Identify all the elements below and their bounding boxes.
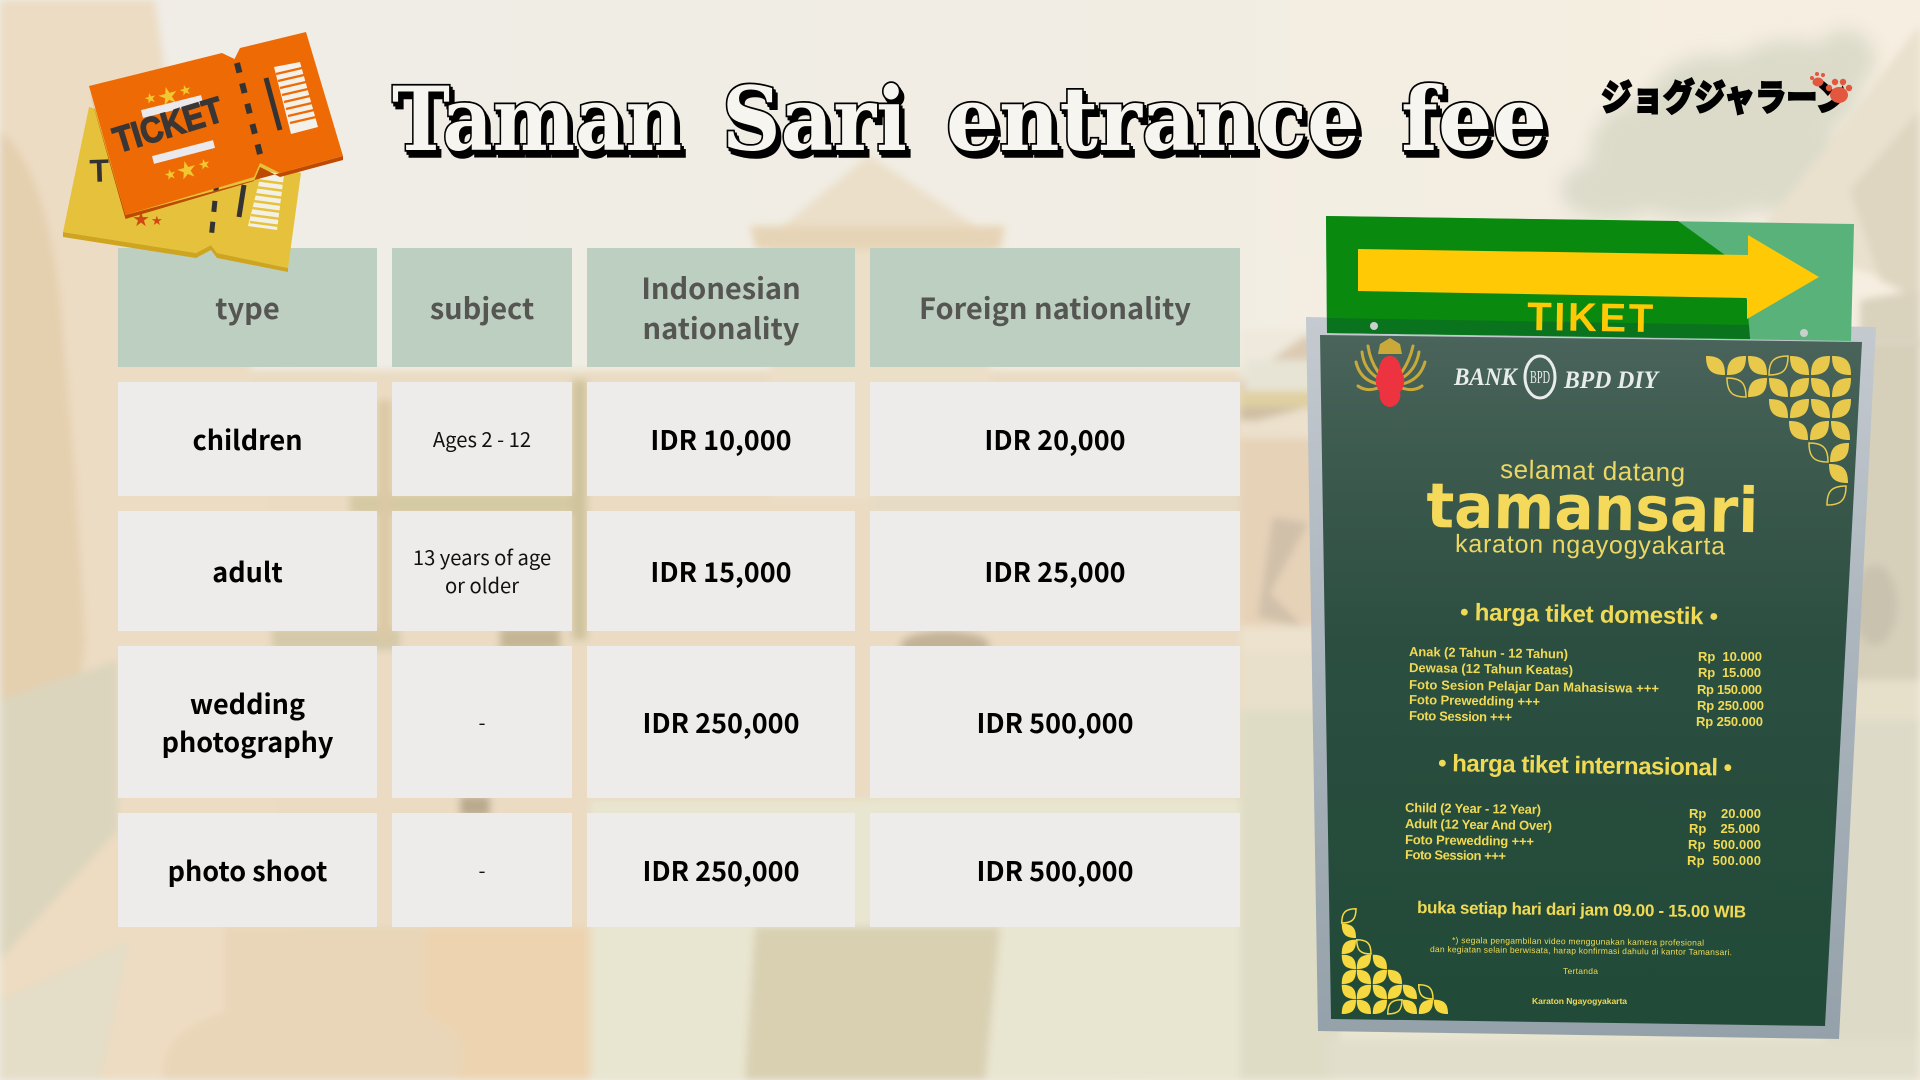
sign section: domestic prices: Dewasa (12 Tahun Keatas): [1409, 660, 1573, 678]
sign section: international prices: Adult (12 Year And Over): [1405, 816, 1552, 833]
sign footnote: Tertanda: [1563, 966, 1598, 976]
steps: [0, 660, 118, 960]
sign section: domestic prices: Foto Sesion Pelajar Dan Mahasiswa +++: [1409, 677, 1660, 696]
bank logo: BPD DIY: [1563, 367, 1661, 394]
leaf ornament bottom left: [1342, 909, 1448, 1014]
row wedding photography: type: wedding: [190, 682, 305, 722]
row adult: subject: [392, 511, 572, 631]
row children: foreign fee: IDR 20,000: [984, 418, 1126, 458]
sign section: domestic prices: Foto Session +++: [1409, 708, 1513, 725]
yellow ticket: T: [89, 152, 110, 189]
emblem: [1356, 338, 1425, 407]
orange ticket: ★: [162, 166, 179, 185]
row adult: subject: 13 years of age: [413, 542, 551, 570]
row photo shoot: type: [118, 813, 377, 927]
row adult: foreign fee: IDR 25,000: [984, 550, 1126, 590]
row photo shoot: foreign fee: [870, 813, 1240, 927]
header: subject: [392, 248, 572, 367]
row children: Indonesian fee: [587, 382, 855, 496]
row photo shoot: Indonesian fee: IDR 250,000: [642, 850, 800, 888]
row wedding photography: Indonesian fee: [587, 646, 855, 798]
orange ticket: ★: [177, 82, 194, 100]
yellow ticket: [63, 107, 301, 272]
water: [590, 800, 1920, 1080]
orange ticket: ★: [142, 90, 159, 108]
sign section: domestic prices: Rp 250.000: [1697, 698, 1764, 713]
sign section: international prices: Rp 500.000: [1687, 853, 1761, 868]
bank logo: BPD: [1530, 367, 1550, 387]
vines through gaps: [350, 494, 575, 514]
row children: Indonesian fee: IDR 10,000: [650, 418, 792, 458]
mid ground: [240, 370, 1250, 950]
sign section: domestic prices: Rp 250.000: [1696, 714, 1763, 729]
sign section: domestic prices: Rp 150.000: [1697, 682, 1762, 697]
tree, top right: [1560, 30, 1875, 220]
row adult: Indonesian fee: [587, 511, 855, 631]
sign footnote: *) segala pengambilan video menggunakan kamera profesional: [1452, 935, 1704, 948]
row adult: subject: or older: [445, 570, 519, 598]
sign section: international prices: Rp 500.000: [1688, 837, 1761, 852]
sign footnote: [1430, 935, 1732, 1006]
header: Indonesian nationality: Indonesian: [641, 266, 801, 308]
bank logo: BANK: [1453, 364, 1519, 391]
header: subject: subject: [430, 286, 534, 328]
sign section: international prices: Rp 25.000: [1689, 821, 1760, 836]
sign section: domestic prices: Rp 15.000: [1698, 665, 1761, 680]
row wedding photography: foreign fee: [870, 646, 1240, 798]
icon: paw prints: [1810, 72, 1852, 103]
row adult: type: [118, 511, 377, 631]
header: Indonesian nationality: nationality: [643, 306, 799, 348]
row adult: Indonesian fee: IDR 15,000: [650, 550, 792, 590]
orange ticket: ★: [196, 156, 213, 174]
row wedding photography: type: photography: [162, 720, 333, 760]
left wall: [0, 0, 280, 1080]
sign section: international prices: Foto Prewedding +++: [1405, 832, 1535, 849]
header: Foreign nationality: [870, 248, 1240, 367]
orange ticket: [89, 32, 343, 219]
row photo shoot: subject: -: [478, 854, 486, 884]
header: Foreign nationality: Foreign nationality: [919, 286, 1191, 328]
dark green board: [1320, 335, 1862, 1026]
sign footnote: Karaton Ngayogyakarta: [1532, 996, 1627, 1006]
row wedding photography: subject: -: [478, 706, 486, 736]
photo: Tamansari ticket sign: [1306, 216, 1876, 1039]
row wedding photography: Indonesian fee: IDR 250,000: [642, 702, 800, 740]
row wedding photography: type: [118, 646, 377, 798]
table: entrance fees: [118, 248, 1240, 927]
right building between table and sign: [1240, 330, 1340, 650]
lower floor: [118, 927, 598, 1080]
row children: subject: [392, 382, 572, 496]
arrow sign: TIKET: [1527, 295, 1654, 341]
bank logo: [1453, 356, 1661, 398]
header: type: [118, 248, 377, 367]
sign section: international prices: Child (2 Year - 12 Year): [1405, 800, 1541, 817]
row adult: type: adult: [212, 550, 283, 590]
sign footnote: dan kegiatan selain berwisata, harap konfirmasi dahulu di kantor Tamansari.: [1430, 944, 1732, 957]
header: Indonesian nationality: [587, 248, 855, 367]
row photo shoot: type: photo shoot: [168, 850, 327, 888]
orange ticket: ★: [154, 80, 182, 112]
arrow sign: [1326, 216, 1854, 341]
row photo shoot: subject: [392, 813, 572, 927]
row children: type: [118, 382, 377, 496]
sign section: international prices: [1405, 750, 1761, 868]
sign section: domestic prices: [1409, 599, 1764, 729]
row wedding photography: foreign fee: IDR 500,000: [976, 702, 1134, 740]
row children: type: children: [192, 418, 303, 458]
right of sign: [1825, 340, 1920, 680]
sign section: domestic prices: Anak (2 Tahun - 12 Tahun): [1409, 644, 1568, 661]
sign section: international prices: • harga tiket internasional •: [1438, 750, 1732, 782]
title: [391, 70, 1549, 170]
row photo shoot: foreign fee: IDR 500,000: [976, 850, 1134, 888]
row children: foreign fee: [870, 382, 1240, 496]
orange ticket: TICKET: [108, 89, 227, 161]
sign section: domestic prices: Rp 10.000: [1698, 649, 1762, 664]
icon: tickets: [63, 32, 343, 272]
yellow ticket: ★: [132, 207, 150, 231]
header: type: type: [215, 286, 280, 328]
metal frame: [1306, 317, 1876, 1039]
sign opening hours: buka setiap hari dari jam 09.00 - 15.00 WIB: [1417, 898, 1746, 922]
leaf ornament top right: [1706, 356, 1851, 505]
sign section: domestic prices: • harga tiket domestik •: [1460, 599, 1718, 631]
sign section: international prices: Foto Session +++: [1405, 847, 1507, 863]
sign heading: selamat datang tamansari: tamansari: [1426, 469, 1759, 547]
row children: subject: Ages 2 - 12: [433, 424, 531, 452]
row adult: foreign fee: [870, 511, 1240, 631]
sign section: international prices: Rp 20.000: [1689, 806, 1761, 821]
sign section: domestic prices: Foto Prewedding +++: [1409, 692, 1541, 709]
row photo shoot: Indonesian fee: [587, 813, 855, 927]
yellow ticket: ★: [151, 214, 163, 229]
orange ticket: ★: [173, 154, 201, 186]
sign heading: selamat datang tamansari: karaton ngayogyakarta: [1455, 530, 1725, 560]
central pavilion: [775, 155, 985, 232]
sign heading: selamat datang tamansari: selamat datang: [1500, 454, 1685, 487]
row wedding photography: subject: [392, 646, 572, 798]
